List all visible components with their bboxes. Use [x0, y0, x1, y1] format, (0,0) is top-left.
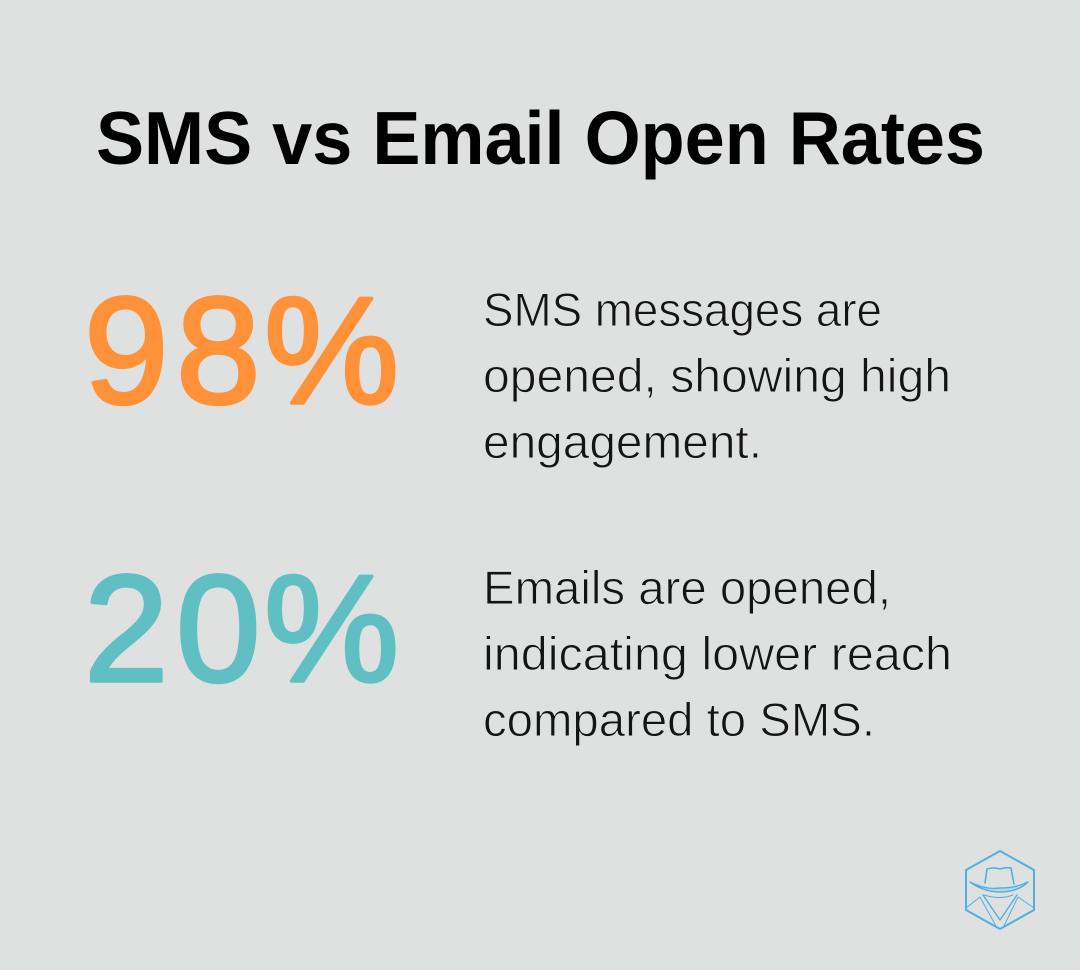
stat: 98%: 98%: [84, 266, 399, 436]
description: SMS: [483, 283, 951, 468]
description: Email: Emails are opened,: [483, 561, 891, 614]
title: SMS vs Email Open Rates: [96, 96, 985, 180]
description: SMS: SMS messages are: [483, 283, 882, 336]
stat: 20%: 20%: [84, 544, 399, 714]
description: Email: indicating lower reach: [483, 627, 952, 680]
description: SMS: opened, showing high: [483, 349, 951, 402]
description: Email: compared to SMS.: [483, 693, 875, 746]
description: Email: [483, 561, 952, 746]
icon: hexagon spy logo: [966, 851, 1034, 929]
description: SMS: engagement.: [483, 415, 762, 468]
